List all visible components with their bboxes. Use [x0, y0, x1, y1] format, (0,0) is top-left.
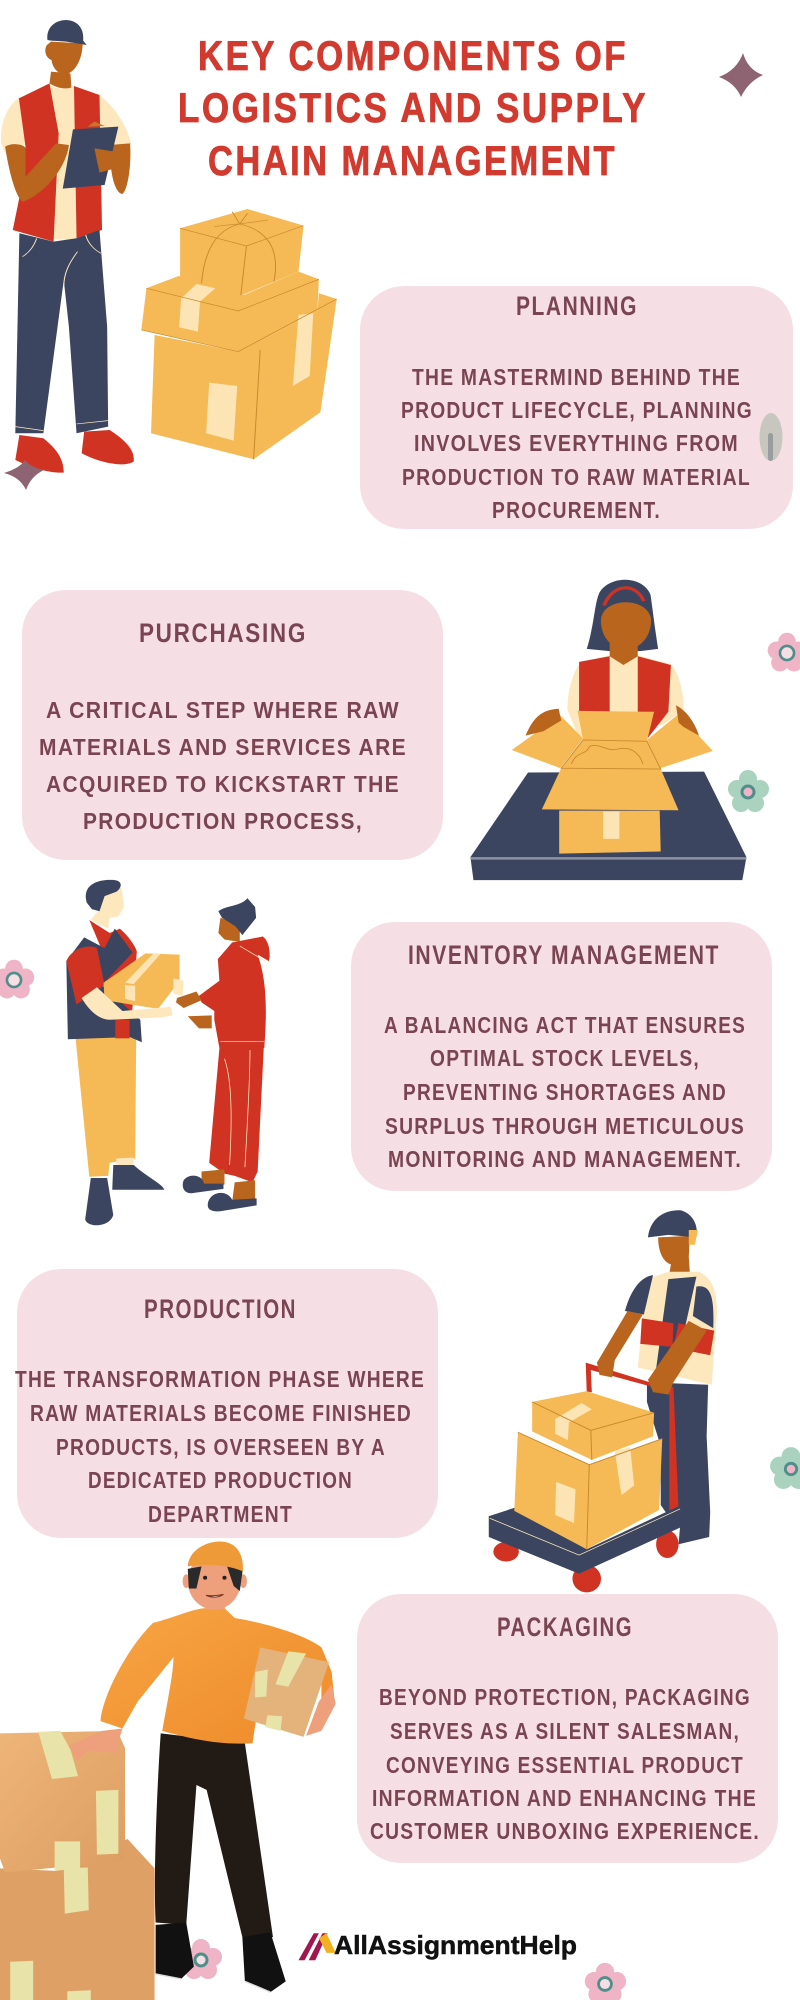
- icon: sparkle bottom left: [4, 460, 44, 490]
- icon: pink flower by foot: [181, 1939, 222, 1979]
- body: planning: PROCUREMENT.: [492, 497, 661, 523]
- icon: pink flower bottom: [585, 1963, 626, 2000]
- panel: inventory management: [351, 922, 772, 1191]
- body: inventory management: MONITORING AND MANAGEMENT.: [388, 1146, 742, 1172]
- body: production: THE TRANSFORMATION PHASE WHERE: [15, 1366, 425, 1392]
- body: packaging: [370, 1684, 760, 1844]
- body: planning: THE MASTERMIND BEHIND THE: [412, 364, 741, 390]
- body: planning: INVOLVES EVERYTHING FROM: [414, 430, 739, 456]
- icon: green flower: [728, 770, 769, 812]
- illustration: woman opening a box: [470, 580, 746, 880]
- logo mark: [298, 1933, 336, 1960]
- icon: green flower right edge: [770, 1447, 800, 1489]
- body: planning: [401, 364, 753, 523]
- body: purchasing: PRODUCTION PROCESS,: [83, 808, 363, 834]
- body: purchasing: [39, 697, 407, 834]
- body: production: DEDICATED PRODUCTION: [88, 1467, 353, 1493]
- panel: packaging: [357, 1594, 778, 1863]
- title: [178, 32, 648, 184]
- heading: inventory management: INVENTORY MANAGEMENT: [408, 940, 720, 970]
- illustration: two people handing over a parcel: [66, 880, 270, 1225]
- heading: planning: PLANNING: [516, 291, 638, 321]
- body: purchasing: MATERIALS AND SERVICES ARE: [39, 734, 407, 760]
- illustration: delivery man with parcels: [0, 1541, 336, 2000]
- illustration: stacked cardboard boxes: [141, 209, 337, 459]
- panel: planning: [360, 286, 793, 529]
- body: production: RAW MATERIALS BECOME FINISHED: [30, 1400, 412, 1426]
- title: CHAIN MANAGEMENT: [208, 137, 617, 184]
- heading: production: PRODUCTION: [144, 1294, 297, 1324]
- icon: sparkle top right: [719, 53, 763, 97]
- panel: purchasing: [22, 590, 443, 860]
- body: purchasing: ACQUIRED TO KICKSTART THE: [46, 771, 400, 797]
- title: KEY COMPONENTS OF: [198, 32, 628, 79]
- icon: pink flower right: [768, 633, 800, 671]
- title: LOGISTICS AND SUPPLY: [178, 84, 648, 131]
- illustration: worker pushing cart with boxes: [489, 1210, 717, 1592]
- body: purchasing: A CRITICAL STEP WHERE RAW: [46, 697, 400, 723]
- illustration: worker with clipboard: [1, 20, 134, 473]
- panel: production: [15, 1269, 438, 1538]
- body: inventory management: OPTIMAL STOCK LEVELS,: [430, 1045, 700, 1071]
- heading: packaging: PACKAGING: [497, 1612, 633, 1642]
- body: inventory management: PREVENTING SHORTAGES AND: [403, 1079, 727, 1105]
- body: production: [15, 1366, 425, 1527]
- icon: pink flower left: [0, 960, 34, 998]
- body: production: DEPARTMENT: [148, 1501, 293, 1527]
- heading: purchasing: PURCHASING: [139, 618, 307, 648]
- icon: grey leaf: [760, 413, 782, 461]
- logo: AllAssignmentHelp: AllAssignmentHelp: [334, 1930, 577, 1960]
- body: inventory management: [384, 1012, 746, 1172]
- body: production: PRODUCTS, IS OVERSEEN BY A: [56, 1434, 386, 1460]
